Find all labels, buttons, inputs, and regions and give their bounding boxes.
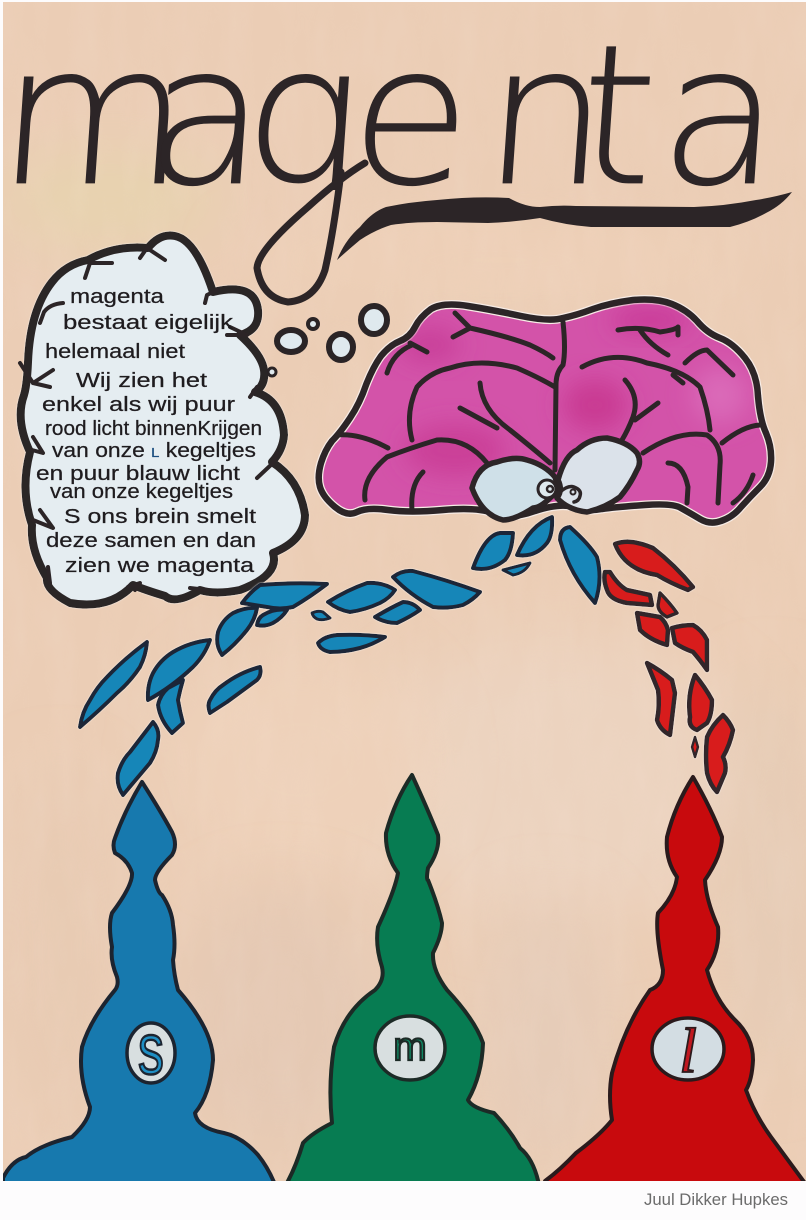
red light petals xyxy=(604,542,733,792)
blue S cone xyxy=(3,782,277,1190)
bubble text: van onze L kegeltjes xyxy=(52,440,256,462)
cone body red xyxy=(545,777,806,1190)
cone body green xyxy=(283,775,540,1190)
brain outline and folds xyxy=(319,300,771,523)
optic nerve left xyxy=(538,480,556,498)
receptor circle l xyxy=(652,1018,724,1080)
blue light petals xyxy=(80,517,600,795)
bubble text: en puur blauw licht xyxy=(36,463,241,485)
brain shape xyxy=(319,300,771,523)
bubble text: magenta xyxy=(70,286,165,308)
bubble text: enkel als wij puur xyxy=(42,394,235,416)
bubble text: deze samen en dan xyxy=(46,530,256,552)
receptor circle m xyxy=(375,1016,445,1080)
thought bubble xyxy=(20,236,305,605)
bubble text: bestaat eigelijk xyxy=(63,312,234,334)
optic nerve right xyxy=(560,487,580,502)
brain eye left xyxy=(472,458,557,520)
brain eye right xyxy=(557,438,640,512)
bubble cusp ticks xyxy=(20,248,283,590)
brain shading xyxy=(400,306,748,476)
bubble text xyxy=(36,286,262,577)
receptor circle s xyxy=(127,1023,175,1083)
thought dots xyxy=(268,306,387,376)
credit: Juul Dikker Hupkes xyxy=(644,1190,788,1209)
bubble text: rood licht binnenKrijgen xyxy=(45,418,262,440)
title: magenta: magenta xyxy=(0,3,788,229)
cone body blue xyxy=(3,782,277,1190)
bubble text: zien we magenta xyxy=(65,555,255,577)
title: magenta xyxy=(16,46,792,306)
bubble text: S ons brein smelt xyxy=(64,506,257,528)
bubble text: van onze kegeltjes xyxy=(50,481,233,503)
bubble text: Wij zien het xyxy=(76,370,208,392)
letter m: m xyxy=(393,1025,427,1069)
title flourish xyxy=(257,163,792,302)
letter s: s xyxy=(138,1010,164,1090)
bubble text: helemaal niet xyxy=(45,341,186,363)
bubble outline xyxy=(21,236,305,605)
brain xyxy=(319,300,771,523)
green M cone xyxy=(283,775,540,1190)
letter l: l xyxy=(679,1015,697,1086)
red L cone xyxy=(545,777,806,1190)
